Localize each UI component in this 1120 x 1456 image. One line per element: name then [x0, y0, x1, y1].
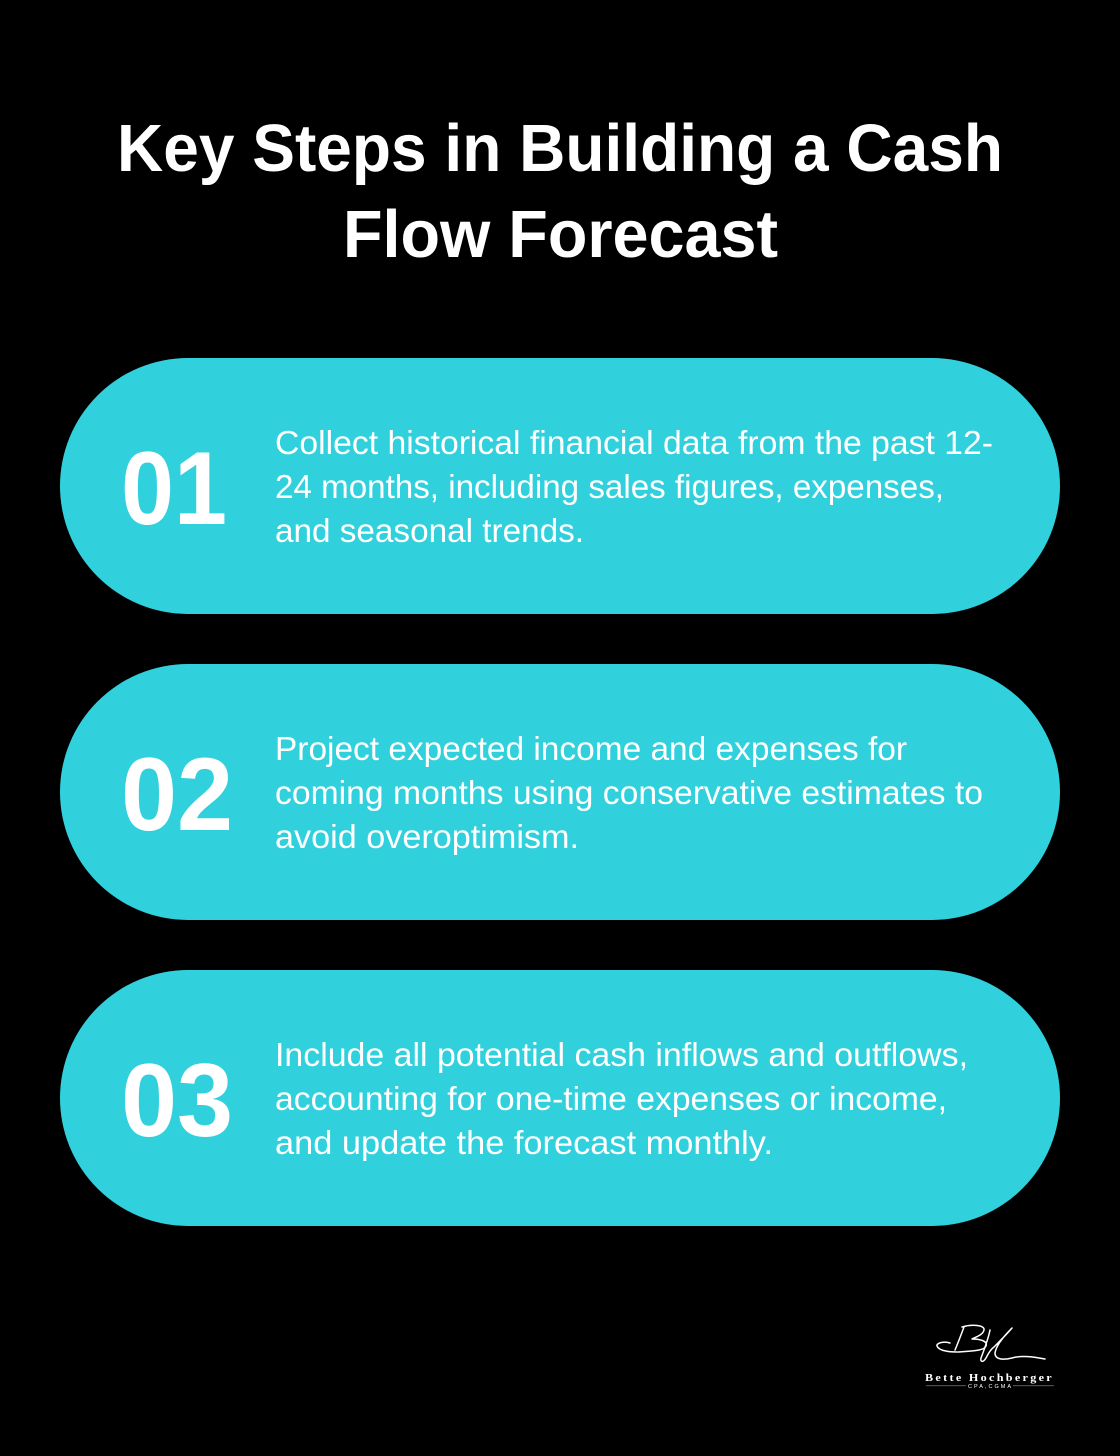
step 01 description: and seasonal trends.: [275, 512, 584, 549]
step 03 description: Include all potential cash inflows and outflows,: [275, 1036, 968, 1073]
logo: Bette Hochberger signature: [925, 1325, 1054, 1390]
logo credentials: CPA,CGMA: [968, 1384, 1011, 1390]
icon: BH signature: [937, 1325, 1045, 1361]
step 03 description: [275, 1036, 968, 1161]
panel: step 02: [60, 664, 1060, 920]
panel: step 01: [60, 358, 1060, 614]
step 01 description: 24 months, including sales figures, expenses,: [275, 468, 944, 505]
step number 03: 03: [121, 1043, 233, 1159]
title: Key Steps in Building a Cash: [117, 111, 1003, 186]
step 01 description: [275, 424, 993, 549]
panel: step 03: [60, 970, 1060, 1226]
step 03 description: accounting for one-time expenses or income,: [275, 1080, 947, 1117]
step number 02: 02: [121, 737, 233, 853]
step 02 description: coming months using conservative estimates to: [275, 774, 983, 811]
title: [117, 111, 1003, 272]
step 02 description: Project expected income and expenses for: [275, 730, 907, 767]
step 02 description: [275, 730, 983, 855]
title: Flow Forecast: [343, 197, 778, 272]
step number 01: 01: [121, 431, 227, 547]
step 03 description: and update the forecast monthly.: [275, 1124, 773, 1161]
step 01 description: Collect historical financial data from the past 12-: [275, 424, 993, 461]
step 02 description: avoid overoptimism.: [275, 818, 579, 855]
logo name: Bette Hochberger: [925, 1373, 1054, 1384]
